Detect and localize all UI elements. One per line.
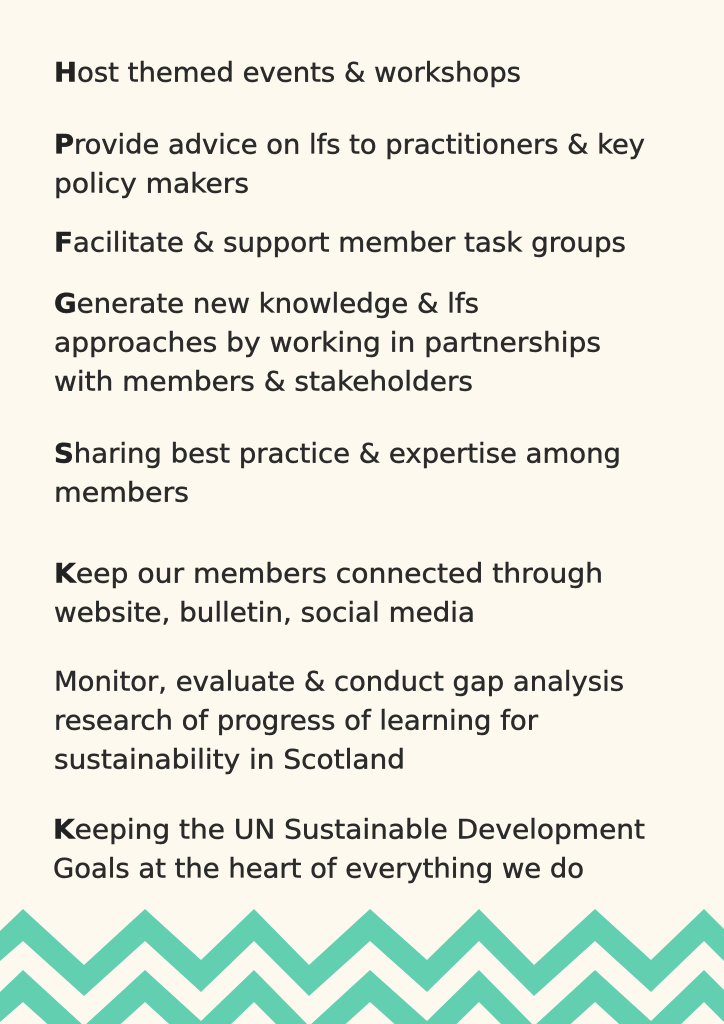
text block: generate new knowledge: approaches by working in partnerships: [54, 328, 601, 358]
text block: monitor and evaluate: [54, 666, 624, 776]
text block: sharing best practice: members: [54, 478, 189, 508]
text block: keep members connected: Keep our members connected through: [54, 558, 603, 590]
text block: generate new knowledge: Generate new knowledge & lfs: [54, 288, 479, 320]
text block: generate new knowledge: with members & stakeholders: [54, 366, 473, 398]
text block: monitor and evaluate: research of progress of learning for: [54, 706, 539, 736]
text block: sharing best practice: Sharing best practice & expertise among: [54, 438, 621, 470]
chevron band: upper: [0, 909, 724, 996]
text block: monitor and evaluate: Monitor, evaluate & conduct gap analysis: [54, 666, 624, 698]
text block: provide advice: policy makers: [54, 168, 249, 200]
text block: keep members connected: [54, 558, 603, 628]
text block: host themed events: Host themed events & workshops: [54, 58, 521, 88]
chevron border: [0, 909, 724, 1024]
text block: provide advice: Provide advice on lfs to practitioners & key: [54, 130, 645, 160]
text block: generate new knowledge: [54, 288, 601, 398]
text block: sharing best practice: [54, 438, 621, 508]
text block: facilitate task groups: Facilitate & support member task groups: [54, 228, 626, 258]
text block: provide advice: [54, 130, 645, 200]
text block: keeping UN goals: Goals at the heart of everything we do: [53, 854, 584, 884]
chevron band: lower: [0, 970, 724, 1024]
text block: keeping UN goals: Keeping the UN Sustainable Development: [53, 814, 645, 846]
text block: monitor and evaluate: sustainability in Scotland: [54, 744, 405, 776]
text block: keeping UN goals: [53, 814, 645, 884]
text block: keep members connected: website, bulletin, social media: [54, 598, 475, 628]
